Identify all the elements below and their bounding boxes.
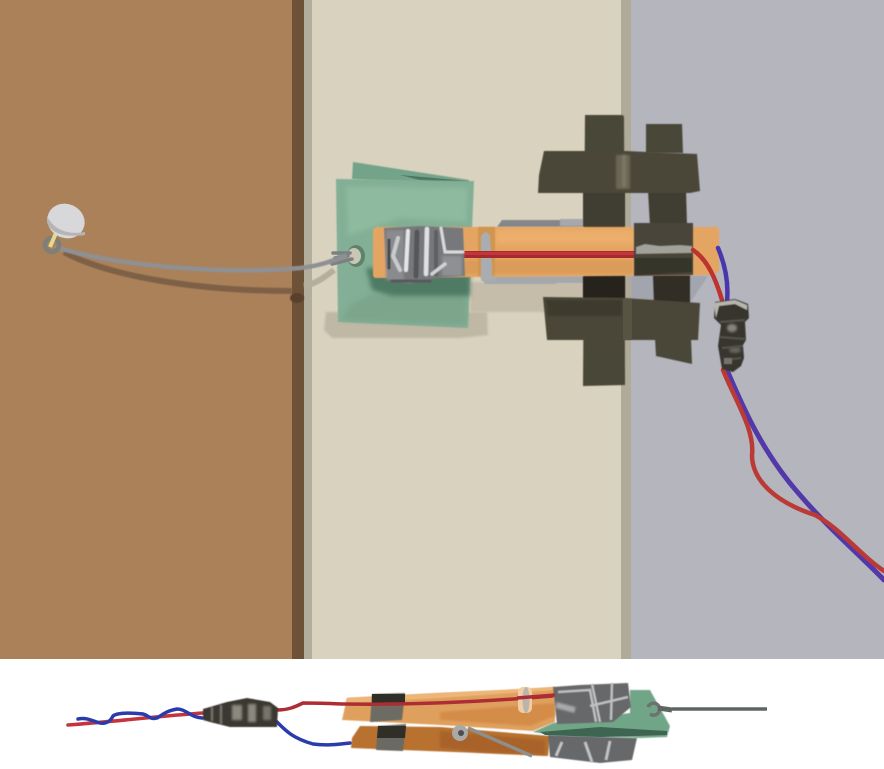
spring metal lever behind clothespin	[480, 219, 585, 284]
front of pad	[336, 179, 474, 328]
straps: dark tape	[538, 115, 700, 386]
eyelet on pad	[332, 245, 365, 267]
slot and spring	[518, 687, 532, 713]
shadow: wire on trim	[304, 270, 334, 286]
metal spring	[481, 231, 496, 281]
nail: thumbtack	[42, 198, 90, 252]
shadow on pad	[366, 268, 470, 296]
tape band: lower	[376, 724, 406, 751]
red wire	[463, 251, 635, 258]
tape on clothespin	[634, 223, 693, 276]
wire connector: dark tape	[714, 299, 749, 372]
shadow: wire on wall	[64, 252, 292, 291]
clothespin upper jaw	[342, 687, 555, 731]
foil wrap: top view	[384, 226, 465, 284]
red wire on clothespin	[277, 696, 553, 710]
upper foil	[553, 683, 631, 724]
band: bottom	[543, 297, 700, 340]
wires: red and blue twisted, top view	[693, 248, 884, 580]
metal pin	[672, 707, 767, 711]
clothespin lower jaw	[351, 726, 550, 756]
clothespin: top view	[373, 227, 719, 281]
green pad	[533, 690, 670, 738]
side view: twisted wires	[68, 709, 350, 745]
tape band: upper	[370, 693, 405, 722]
metal coil	[452, 725, 468, 741]
shadow: pad and clothespin	[290, 276, 708, 338]
back flap	[352, 162, 469, 185]
wire: from nail to pad	[56, 247, 345, 270]
band: top	[538, 151, 700, 193]
panel: side view white strip	[0, 659, 884, 769]
panel: green pad	[336, 162, 474, 328]
lower foil	[548, 735, 637, 763]
spring lever	[468, 728, 532, 756]
eyelet	[648, 703, 660, 715]
side view: wire connector	[203, 698, 278, 727]
side view: clothespin assembly	[277, 683, 767, 763]
